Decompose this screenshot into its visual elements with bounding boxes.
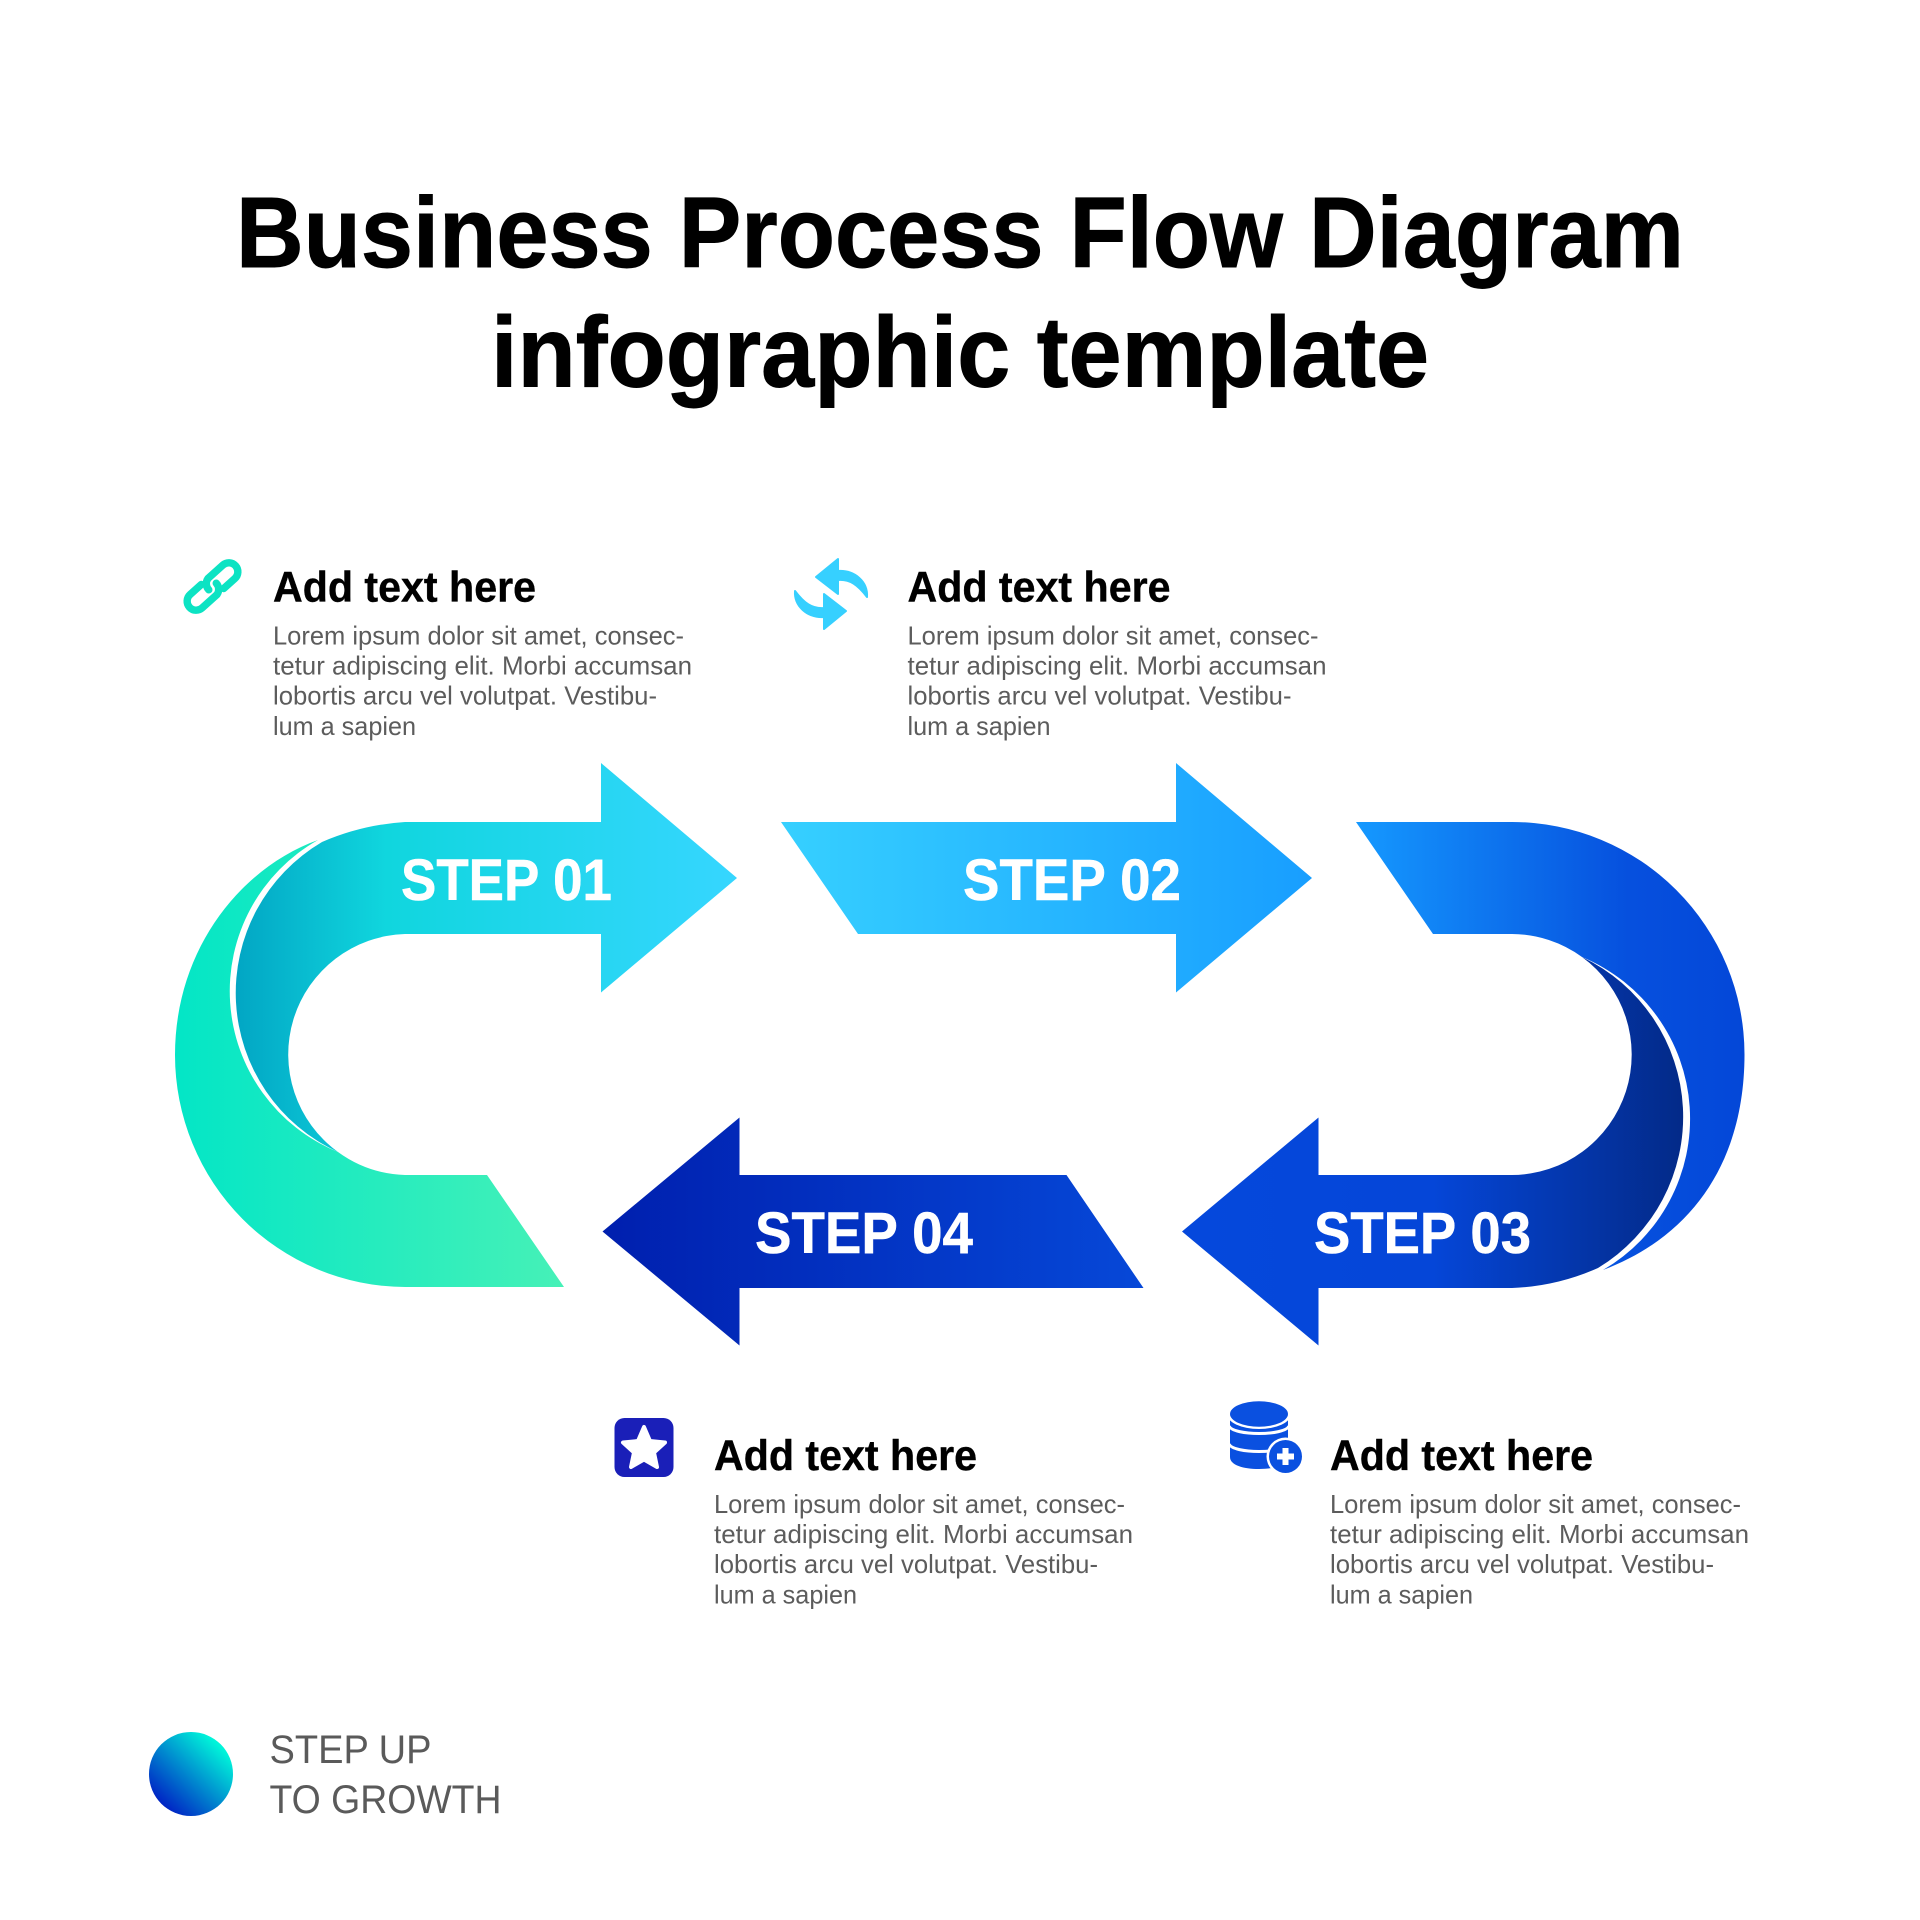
body text: Lorem ipsum dolor sit amet, consec- — [273, 620, 684, 650]
body text: lobortis arcu vel volutpat. Vestibu- — [908, 680, 1292, 710]
footer text: TO GROWTH — [270, 1778, 502, 1822]
step 4 shape — [602, 1118, 1144, 1346]
body text: lobortis arcu vel volutpat. Vestibu- — [1330, 1549, 1714, 1579]
body text: tetur adipiscing elit. Morbi accumsan — [714, 1519, 1133, 1549]
step 2 label: STEP 02 — [963, 848, 1181, 913]
icon: star badge — [614, 1418, 674, 1477]
title: Business Process Flow Diagram — [236, 177, 1684, 289]
body text — [908, 620, 1326, 741]
step 1 front arrow — [236, 763, 737, 1152]
footer text: STEP UP — [270, 1728, 432, 1772]
title: infographic template — [491, 296, 1429, 408]
step 2 arrow — [781, 763, 1312, 992]
step 4 arrow — [602, 1118, 1144, 1346]
body text: lum a sapien — [1330, 1580, 1473, 1610]
body text — [273, 620, 692, 741]
step 1 arrow — [175, 763, 737, 1287]
icon: chain link — [183, 559, 242, 614]
body text: lobortis arcu vel volutpat. Vestibu- — [273, 680, 657, 710]
footer text — [270, 1728, 502, 1822]
icon: refresh arrows — [795, 559, 867, 629]
body text — [1330, 1489, 1749, 1610]
heading: Add text here — [908, 564, 1170, 612]
text block: step 4 — [714, 1432, 1133, 1610]
body text: Lorem ipsum dolor sit amet, consec- — [908, 620, 1318, 650]
heading: Add text here — [1330, 1432, 1593, 1480]
text block: step 1 — [273, 564, 692, 741]
text block: step 3 — [1330, 1432, 1749, 1610]
step 1 back band — [175, 840, 564, 1287]
body text: lum a sapien — [908, 711, 1050, 741]
body text: tetur adipiscing elit. Morbi accumsan — [273, 650, 692, 680]
step 1 label: STEP 01 — [401, 848, 612, 913]
step 4 label: STEP 04 — [755, 1201, 973, 1266]
body text: Lorem ipsum dolor sit amet, consec- — [714, 1489, 1125, 1519]
heading: Add text here — [273, 564, 536, 612]
body text: tetur adipiscing elit. Morbi accumsan — [1330, 1519, 1749, 1549]
step 3 arrow — [1182, 822, 1744, 1346]
body text: lum a sapien — [273, 711, 416, 741]
body text: lobortis arcu vel volutpat. Vestibu- — [714, 1549, 1098, 1579]
heading: Add text here — [714, 1432, 977, 1480]
step 3 label: STEP 03 — [1314, 1201, 1531, 1266]
title — [236, 177, 1684, 408]
step 2 shape — [781, 763, 1312, 992]
icon: database plus — [1227, 1399, 1304, 1476]
body text: tetur adipiscing elit. Morbi accumsan — [908, 650, 1326, 680]
footer logo circle — [149, 1732, 233, 1816]
body text: lum a sapien — [714, 1580, 857, 1610]
body text — [714, 1489, 1133, 1610]
body text: Lorem ipsum dolor sit amet, consec- — [1330, 1489, 1741, 1519]
step 3 front arrow — [1182, 957, 1683, 1346]
text block: step 2 — [908, 564, 1326, 741]
step 3 back band — [1356, 822, 1744, 1270]
